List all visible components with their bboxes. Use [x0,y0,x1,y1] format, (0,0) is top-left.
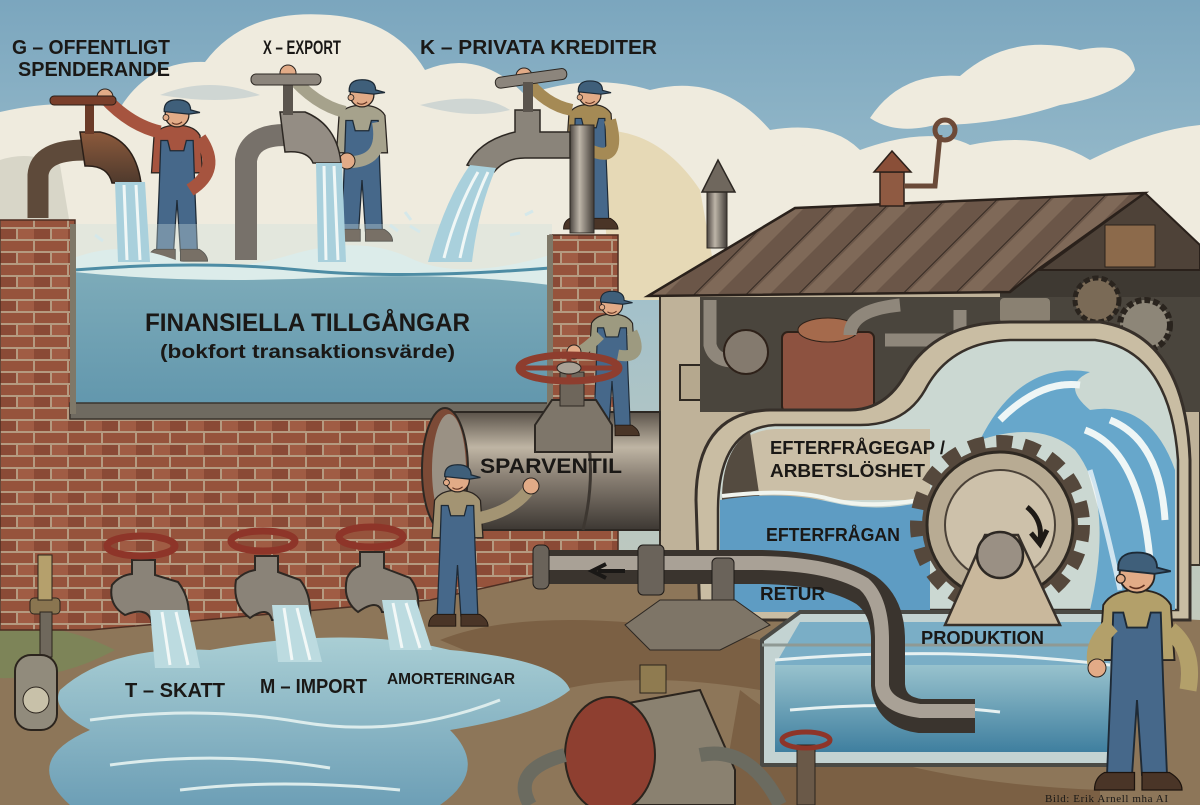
worker: G tap operator [97,89,209,261]
demand water [720,495,930,612]
housing inner chamber [718,340,1178,610]
water splash [980,370,1175,610]
house wall [660,290,1200,565]
worker: pipe worker [429,465,539,626]
label: tank text: (bokfort transaktionsvärde) [160,342,455,363]
glass water tank [70,224,553,419]
panel: brick wall with tank [0,220,640,630]
label: T skatt: T – SKATT [125,680,225,702]
icon: amortisation valve [339,527,432,650]
wheel disc [927,452,1073,598]
support stand [945,535,1060,625]
interior machinery [700,262,1200,412]
icon: rusty machine bottom [525,665,830,805]
water stream from G tap [115,182,150,262]
label: efterfrågegap: EFTERFRÅGEGAP / [770,438,945,458]
icon: M valve [231,531,322,662]
hub [977,532,1023,578]
label: M import: M – IMPORT [260,676,367,698]
vent pipe [702,160,735,248]
chimney with cap [874,120,955,206]
label: efterfrågegap: ARBETSLÖSHET [770,461,925,481]
dark chamber rim [722,432,760,500]
panel: production tank [762,612,1120,765]
worker: K tap operator [516,68,618,229]
label: efterfrågan: EFTERFRÅGAN [766,525,900,545]
icon: X tap [246,74,341,260]
gear teeth [922,447,1078,603]
panel: water wheel [922,447,1078,625]
panel: puddle [49,638,570,805]
grass patch [0,626,115,678]
icon: valve wheel and bonnet [519,355,619,452]
label: X: X – EXPORT [263,38,341,59]
wheel housing [696,322,1190,620]
icon: small machine left [15,555,60,730]
label: G: G – OFFENTLIGT [12,37,170,59]
icon: K tap and pipe [467,68,594,233]
label: G [12,37,170,81]
icon: G tap [38,96,141,218]
label: efterfrågegap [770,438,945,481]
return pipe [533,545,975,716]
splash droplets [95,211,533,241]
image credit: Bild: Erik Arnell mha AI [1045,793,1168,805]
label: amorteringar: AMORTERINGAR [387,671,515,688]
panel: saving valve pipe [422,408,660,532]
label: retur: RETUR [760,584,825,604]
flow arrow [592,564,625,578]
label: sparventil: SPARVENTIL [480,455,622,478]
control sign [680,365,716,400]
water stream from X tap [316,163,346,262]
label: tank text: FINANSIELLA TILLGÅNGAR [145,308,470,337]
clouds [0,14,1200,300]
brick wall [0,220,640,630]
label: tank text [145,308,470,363]
label: produktion: PRODUKTION [921,628,1044,648]
mud patches [440,620,1100,805]
ground [0,550,1200,805]
water stream from K tap [428,165,496,262]
rotation arrow [1027,507,1047,544]
worker: X tap operator [280,65,393,241]
panel: machine house [648,120,1200,620]
icon: T valve [107,536,200,668]
roof gable attic [1040,193,1200,270]
gap upper chamber [722,429,930,500]
label: K: K – PRIVATA KREDITER [420,37,658,59]
label: G: SPENDERANDE [18,59,170,81]
roof [648,193,1145,296]
worker: valve operator [567,291,639,436]
worker: right foreground [1088,552,1190,790]
